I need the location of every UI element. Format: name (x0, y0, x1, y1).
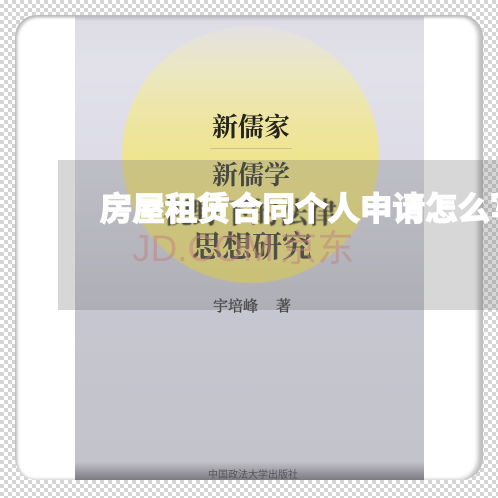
divider under title (210, 148, 292, 149)
book title line 2: 新儒学 (212, 161, 290, 190)
translucent banner (58, 160, 498, 310)
book title line 4: 思想研究 (192, 231, 312, 264)
author: 宇培峰 著 (213, 299, 291, 315)
yellow circle (122, 26, 379, 283)
book title line 1: 新儒家 (212, 113, 290, 142)
watermark JD.COM: JD.COM 京东 (132, 228, 354, 269)
panel: book cover (75, 16, 424, 480)
book title line 3: 视野下的法律 (163, 198, 337, 230)
